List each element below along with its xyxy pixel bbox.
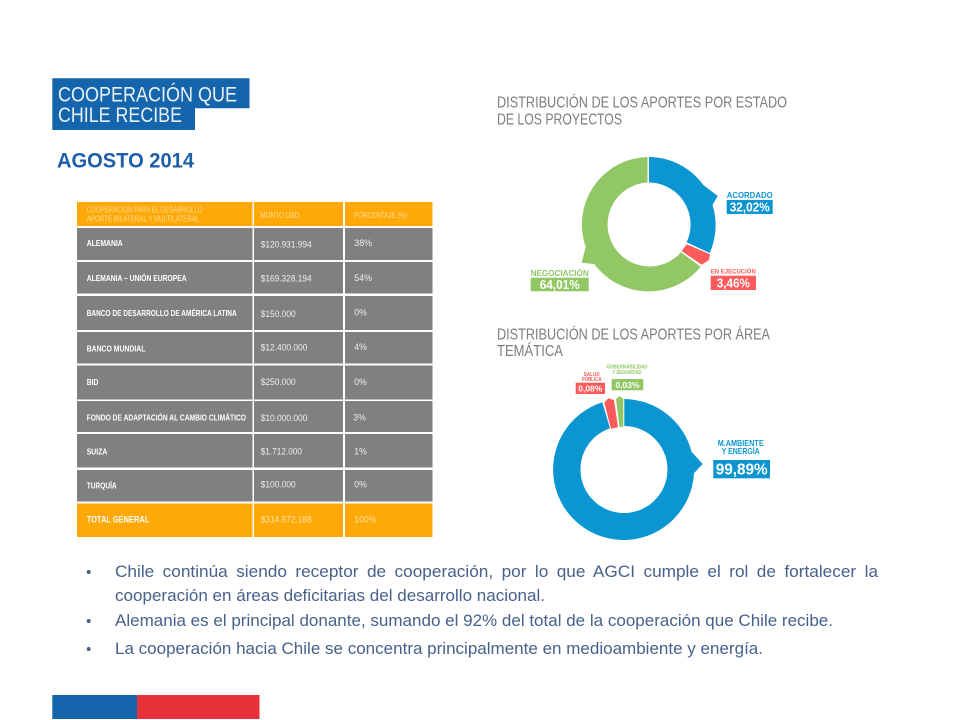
- label: en ejecución: EN EJECUCIÓN: [711, 266, 756, 276]
- row: BID: $250.000: [261, 377, 296, 388]
- table: cooperation by donor: [77, 202, 432, 537]
- row: Alemania: ALEMANIA: [87, 238, 123, 248]
- row: Fondo de Adaptación al Cambio Climático: $10.000.000: [261, 413, 307, 424]
- label: negociación: [531, 267, 589, 292]
- row: Banco de Desarrollo de América Latina: $150.000: [261, 309, 296, 320]
- row: Banco de Desarrollo de América Latina: 0%: [354, 308, 367, 319]
- row: Turquía: TURQUÍA: [87, 480, 117, 490]
- row: Suiza: [77, 434, 432, 468]
- segment: medio ambiente y energía: [553, 399, 703, 540]
- heading: distribution by thematic area: TEMÁTICA: [497, 343, 564, 360]
- title banner: [52, 78, 249, 130]
- row: Fondo de Adaptación al Cambio Climático: 3%: [353, 413, 366, 424]
- title banner: COOPERACIÓN QUE: [58, 84, 237, 106]
- row: Alemania: 38%: [354, 238, 373, 249]
- bullet 3: La cooperación hacia Chile se concentra principalmente en medioambiente y energía.: [115, 640, 763, 658]
- label: acordado: [727, 190, 773, 214]
- row: Fondo de Adaptación al Cambio Climático: [77, 401, 432, 432]
- label: gobernabilidad y seguridad: Y SEGURIDAD: [612, 370, 642, 376]
- row: Total general: $314.872.188: [261, 514, 312, 525]
- heading: distribution by project status: DE LOS PROYECTOS: [497, 111, 622, 128]
- row: Banco Mundial: 4%: [354, 342, 367, 353]
- row: Fondo de Adaptación al Cambio Climático: FONDO DE ADAPTACIÓN AL CAMBIO CLIMÁTICO: [87, 412, 246, 423]
- footer flag bar: [52, 695, 259, 719]
- donut chart: project status: [582, 157, 718, 291]
- bullet list: key findings: [87, 563, 879, 658]
- table header row: COOPERACIÓN PARA EL DESARROLLO: [87, 206, 203, 215]
- label: gobernabilidad y seguridad: GOBERNABILIDAD: [606, 364, 648, 370]
- row: Suiza: 1%: [354, 447, 367, 458]
- table header row: [77, 202, 432, 226]
- heading: distribution by project status: DISTRIBUCIÓN DE LOS APORTES POR ESTADO: [497, 95, 787, 112]
- row: Turquía: $100.000: [261, 480, 296, 491]
- label: en ejecución: [711, 266, 756, 290]
- donut chart: thematic area: [553, 396, 703, 540]
- segment: negociación: [582, 157, 701, 291]
- row: Alemania - Unión Europea: $169.328.194: [261, 274, 312, 285]
- label: acordado: ACORDADO: [727, 190, 773, 200]
- label: acordado: 32,02%: [730, 200, 770, 214]
- segment: en ejecución: [682, 244, 710, 265]
- row: Alemania - Unión Europea: 54%: [354, 273, 373, 284]
- table header row: APORTE BILATERAL Y MULTILATERAL: [87, 214, 200, 223]
- label: medio ambiente y energía: [713, 438, 770, 478]
- label: salud pública: [576, 372, 605, 394]
- row: Suiza: SUIZA: [87, 447, 107, 457]
- row: Banco Mundial: BANCO MUNDIAL: [87, 344, 145, 354]
- row: Banco Mundial: $12.400.000: [261, 342, 307, 353]
- row: Banco Mundial: [77, 332, 432, 364]
- title banner: CHILE RECIBE: [58, 104, 182, 127]
- label: medio ambiente y energía: M.AMBIENTE: [718, 438, 764, 448]
- label: salud pública: 0,08%: [578, 384, 603, 394]
- row: BID: [77, 366, 432, 400]
- segment: gobernabilidad y seguridad: [616, 396, 623, 427]
- row: Banco de Desarrollo de América Latina: BANCO DE DESARROLLO DE AMÉRICA LATINA: [87, 308, 237, 318]
- label: medio ambiente y energía: 99,89%: [716, 462, 768, 478]
- label: negociación: 64,01%: [540, 277, 580, 292]
- segment: acordado: [649, 157, 718, 253]
- row: Total general: TOTAL GENERAL: [87, 514, 150, 525]
- bullet 2: Alemania es el principal donante, sumando el 92% del total de la cooperación que Chile recibe.: [115, 612, 833, 630]
- label: negociación: NEGOCIACIÓN: [531, 267, 589, 278]
- label: en ejecución: 3,46%: [717, 276, 750, 290]
- table header row: PORCENTAJE (%): [354, 211, 407, 220]
- row: Alemania - Unión Europea: ALEMANIA – UNIÓN EUROPEA: [87, 272, 187, 283]
- table header row: MONTO USD: [260, 211, 299, 220]
- row: Alemania: [77, 228, 432, 260]
- label: medio ambiente y energía: Y ENERGÍA: [722, 446, 760, 456]
- label: salud pública: SALUD: [584, 372, 600, 378]
- row: BID: 0%: [354, 377, 367, 388]
- bullet 1: cooperación en áreas deficitarias del desarrollo nacional.: [115, 587, 545, 605]
- label: salud pública: PÚBLICA: [582, 376, 602, 383]
- row: Banco de Desarrollo de América Latina: [77, 296, 432, 330]
- row: Turquía: [77, 470, 432, 502]
- date heading: AGOSTO 2014: [57, 150, 194, 173]
- label: gobernabilidad y seguridad: [606, 364, 648, 390]
- row: BID: BID: [87, 377, 98, 387]
- segment: salud pública: [604, 398, 618, 429]
- row: Suiza: $1.712.000: [261, 447, 302, 458]
- row: Total general: [77, 504, 432, 537]
- row: Alemania: $120.931.994: [261, 239, 312, 250]
- heading: distribution by thematic area: [497, 326, 771, 360]
- row: Turquía: 0%: [354, 480, 367, 491]
- bullet 1: [87, 563, 879, 605]
- row: Total general: 100%: [354, 514, 377, 525]
- row: Alemania - Unión Europea: [77, 262, 432, 294]
- heading: distribution by project status: [497, 95, 787, 128]
- heading: distribution by thematic area: DISTRIBUCIÓN DE LOS APORTES POR ÁREA: [497, 326, 771, 343]
- label: gobernabilidad y seguridad: 0,03%: [616, 380, 640, 390]
- bullet 1: Chile continúa siendo receptor de cooperación, por lo que AGCI cumple el rol de fortalecer la: [115, 563, 879, 581]
